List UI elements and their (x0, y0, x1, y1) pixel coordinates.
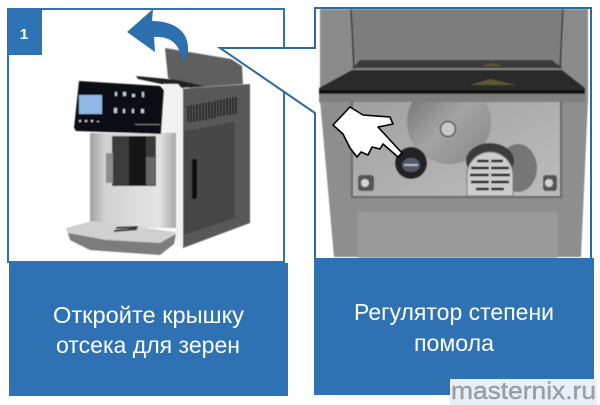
callout connector frame (220, 8, 591, 258)
side door (184, 122, 235, 235)
top lip (136, 76, 204, 88)
caption box: grind regulator: Регулятор степени (354, 299, 554, 325)
caption box: grind regulator (314, 258, 594, 395)
corner screws (358, 175, 374, 191)
side slot (192, 159, 197, 199)
steel front (90, 133, 176, 228)
panel: open lid step frame (8, 9, 284, 262)
side vents (188, 97, 236, 122)
badge: step number (8, 9, 42, 55)
drip tray (66, 221, 176, 255)
icon: coffee machine (66, 48, 250, 255)
control panel (74, 81, 164, 134)
icon: pointing hand (333, 107, 402, 157)
upper compartment (352, 9, 562, 69)
watermark: masternix.ru (451, 378, 596, 405)
machine back (320, 9, 588, 104)
lower plate (358, 212, 558, 258)
panel buttons (79, 92, 160, 125)
chute (466, 143, 537, 196)
panel: grinder photo (315, 8, 590, 258)
arrow: lift lid (127, 9, 188, 63)
open bean compartment lid (165, 48, 243, 88)
caption box: open lid: отсека для зерен (56, 332, 240, 358)
caption box: grind regulator: помола (414, 330, 494, 356)
coffee spout (106, 136, 156, 186)
caption box: open lid: Откройте крышку (53, 302, 244, 328)
white corner strip (160, 84, 183, 247)
machine side body (178, 84, 250, 248)
open lid (319, 60, 585, 102)
grind regulator knob (395, 147, 427, 179)
caption box: open lid (9, 263, 288, 396)
tray grille (114, 227, 138, 231)
grinder dome (407, 80, 491, 164)
recess (352, 100, 561, 197)
display (79, 95, 102, 114)
badge: step number: 1 (20, 26, 28, 43)
